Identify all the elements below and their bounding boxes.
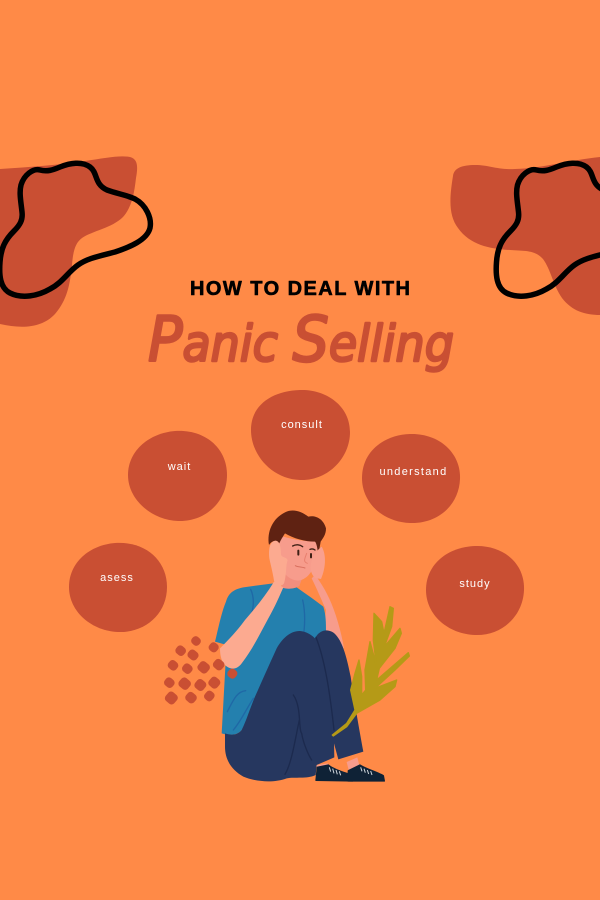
decorative blob: top left [0, 156, 150, 327]
neck [282, 572, 303, 589]
step bubble: wait [128, 431, 227, 521]
shirt [215, 583, 326, 735]
far arm [312, 575, 344, 648]
decorative blob: top right [450, 157, 600, 315]
step bubble: study [426, 546, 524, 635]
step bubble: asess [69, 543, 167, 632]
face details [293, 545, 315, 568]
step bubble: consult [251, 390, 350, 480]
hands [269, 541, 288, 586]
near arm [220, 582, 283, 669]
illustration: worried man with plant [215, 511, 409, 781]
step bubble: wait: wait [167, 461, 191, 473]
step bubble: understand: understand [379, 466, 448, 478]
step bubble: study: study [459, 578, 491, 590]
step bubble: consult: consult [281, 419, 323, 431]
hair [269, 511, 326, 555]
step bubble: asess: asess [100, 572, 134, 584]
face [278, 535, 318, 581]
decorative dots [163, 635, 239, 706]
title: how to deal with: HOW TO DEAL WITH [190, 278, 410, 300]
plant [332, 607, 409, 736]
ankles [317, 757, 359, 771]
step bubble: understand [362, 434, 460, 523]
shoes [316, 765, 353, 781]
title: panic selling: Panic Selling [148, 303, 454, 376]
pants [225, 630, 363, 781]
